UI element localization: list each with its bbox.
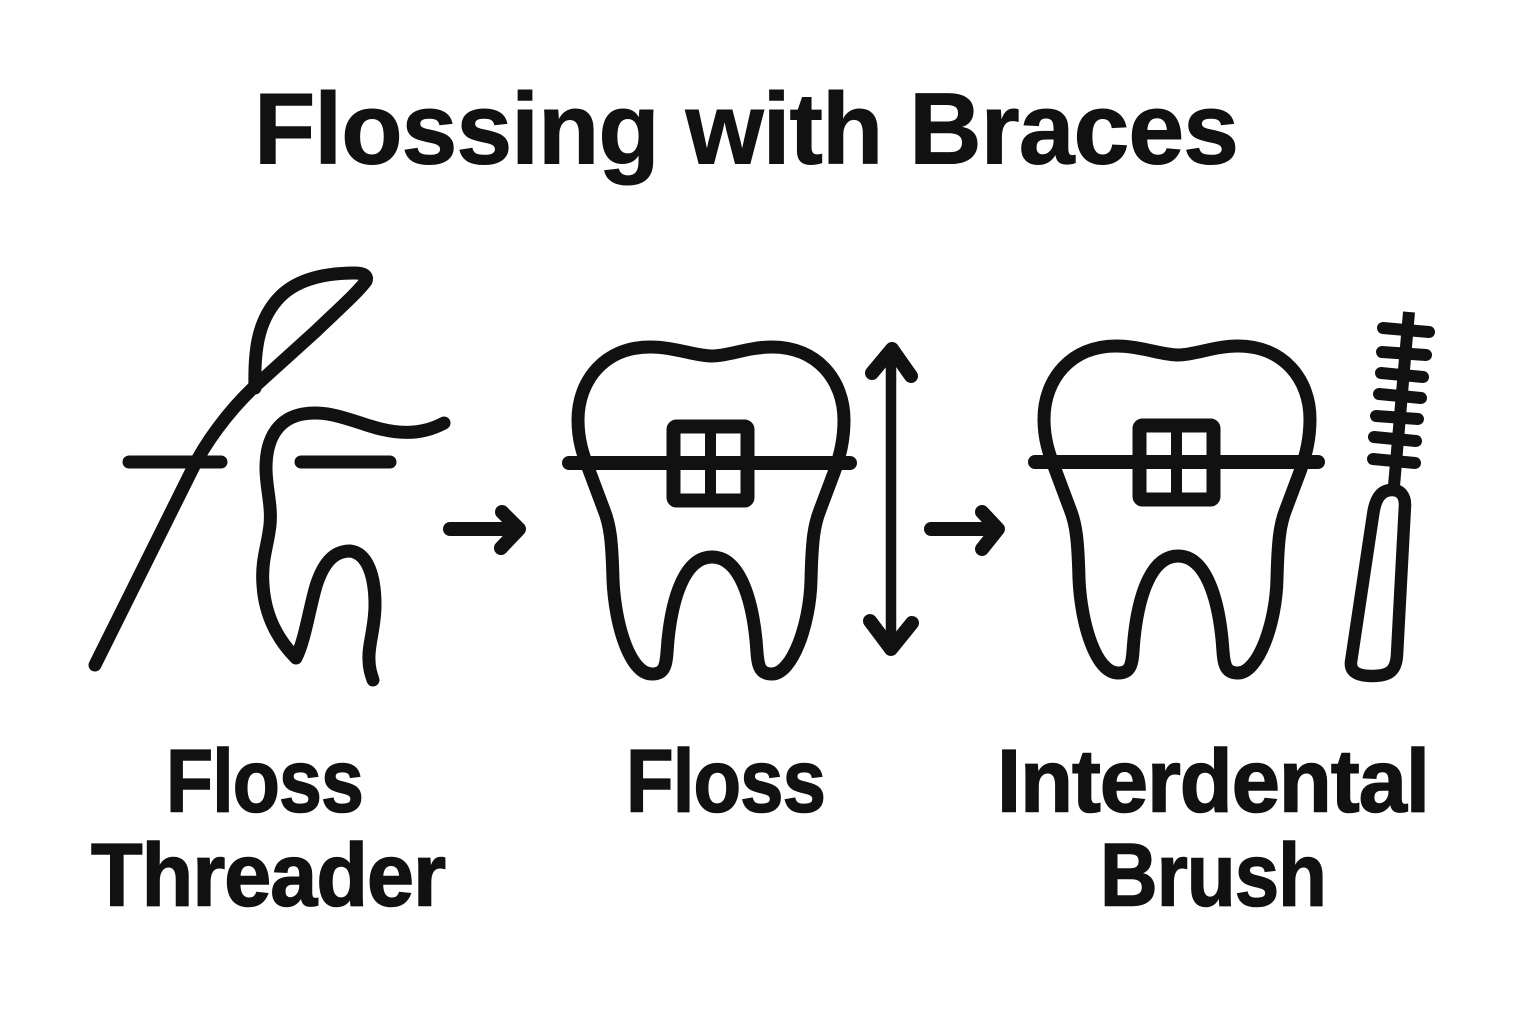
icon: arch wire — [569, 456, 850, 470]
icon: bracket — [1140, 425, 1214, 500]
title: Flossing with Braces — [254, 74, 1238, 186]
brush bristles — [1373, 328, 1429, 463]
label: floss threader: Threader — [91, 824, 445, 924]
panel: floss tooth icon — [569, 347, 850, 674]
icon: tooth side profile — [263, 413, 444, 680]
icon: interdental brush — [1351, 312, 1429, 676]
brush handle — [1351, 490, 1405, 676]
label: floss: Floss — [626, 730, 825, 830]
icon: tooth outline — [578, 347, 844, 674]
panel: floss threader icon — [95, 273, 444, 680]
icon: threader needle line — [95, 281, 366, 665]
brush stem — [1394, 312, 1409, 486]
label: interdental brush: Interdental — [997, 730, 1429, 830]
arrow: threader to floss — [450, 512, 519, 548]
icon: tooth outline — [1044, 346, 1310, 673]
label: floss threader: Floss — [166, 730, 363, 830]
arrow: up and down motion — [870, 349, 912, 650]
label: floss threader — [91, 730, 445, 924]
icon: right wire segment — [301, 456, 390, 468]
label: interdental brush: Brush — [1100, 824, 1326, 924]
icon: left wire segment — [129, 456, 221, 468]
icon: threader loop — [255, 273, 367, 388]
panel: interdental tooth icon — [1035, 346, 1318, 673]
arrow: floss to interdental brush — [931, 512, 998, 549]
icon: arch wire — [1035, 455, 1318, 469]
icon: bracket — [674, 426, 748, 500]
label: interdental brush — [997, 730, 1429, 924]
